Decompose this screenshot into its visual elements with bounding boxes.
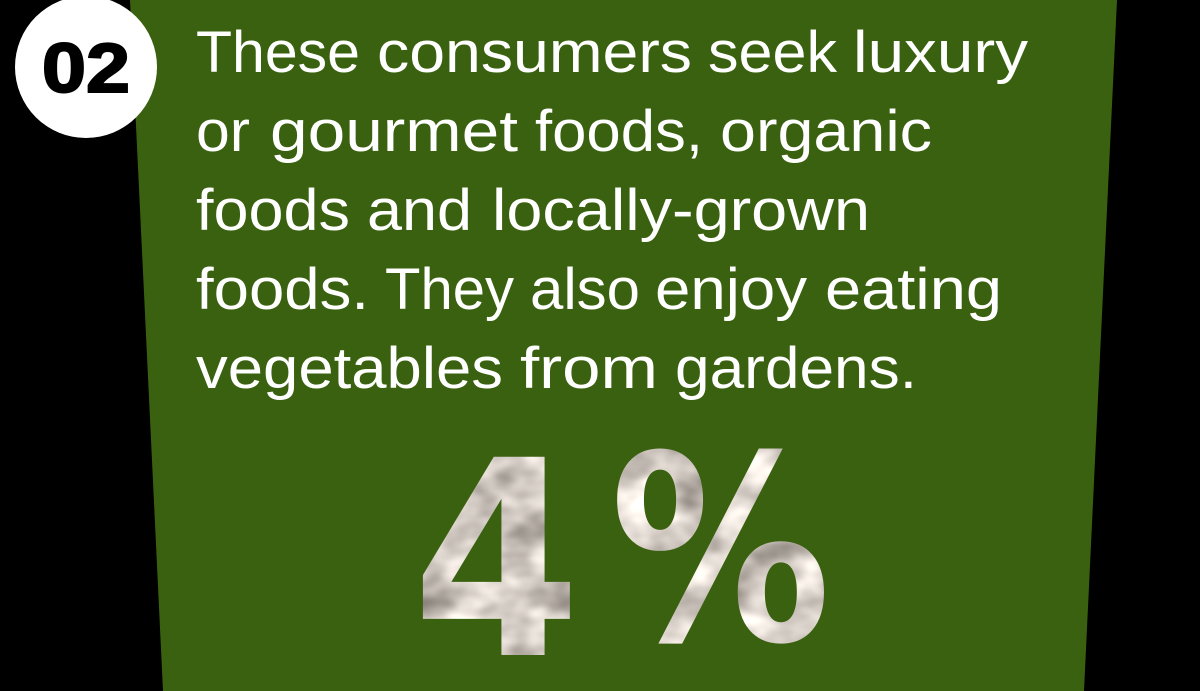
text block: description: consumers xyxy=(377,20,692,85)
text block: description: eating xyxy=(825,257,1002,322)
text block: description: luxury xyxy=(853,20,1028,85)
text block: description: These xyxy=(196,20,360,85)
text block: description xyxy=(196,20,1028,401)
text block: description: foods, xyxy=(535,99,703,164)
text block: description: gourmet xyxy=(270,99,518,164)
text block: description: organic xyxy=(720,99,932,164)
text block: description: enjoy xyxy=(655,257,807,322)
text block: description: from xyxy=(520,336,658,401)
badge: number 02: 02 xyxy=(42,29,130,107)
text block: description: and xyxy=(367,178,472,243)
badge: number 02 xyxy=(15,0,157,138)
statistic: 4% xyxy=(412,401,831,691)
text block: description: They xyxy=(385,257,514,322)
text block: description: gardens. xyxy=(675,336,917,401)
text block: description: locally-grown xyxy=(492,178,870,243)
text block: description: foods xyxy=(196,178,350,243)
text block: description: vegetables xyxy=(196,336,503,401)
text block: description: seek xyxy=(708,20,838,85)
text block: description: foods. xyxy=(196,257,369,322)
text block: description: also xyxy=(530,257,640,322)
text block: description: or xyxy=(196,99,250,164)
